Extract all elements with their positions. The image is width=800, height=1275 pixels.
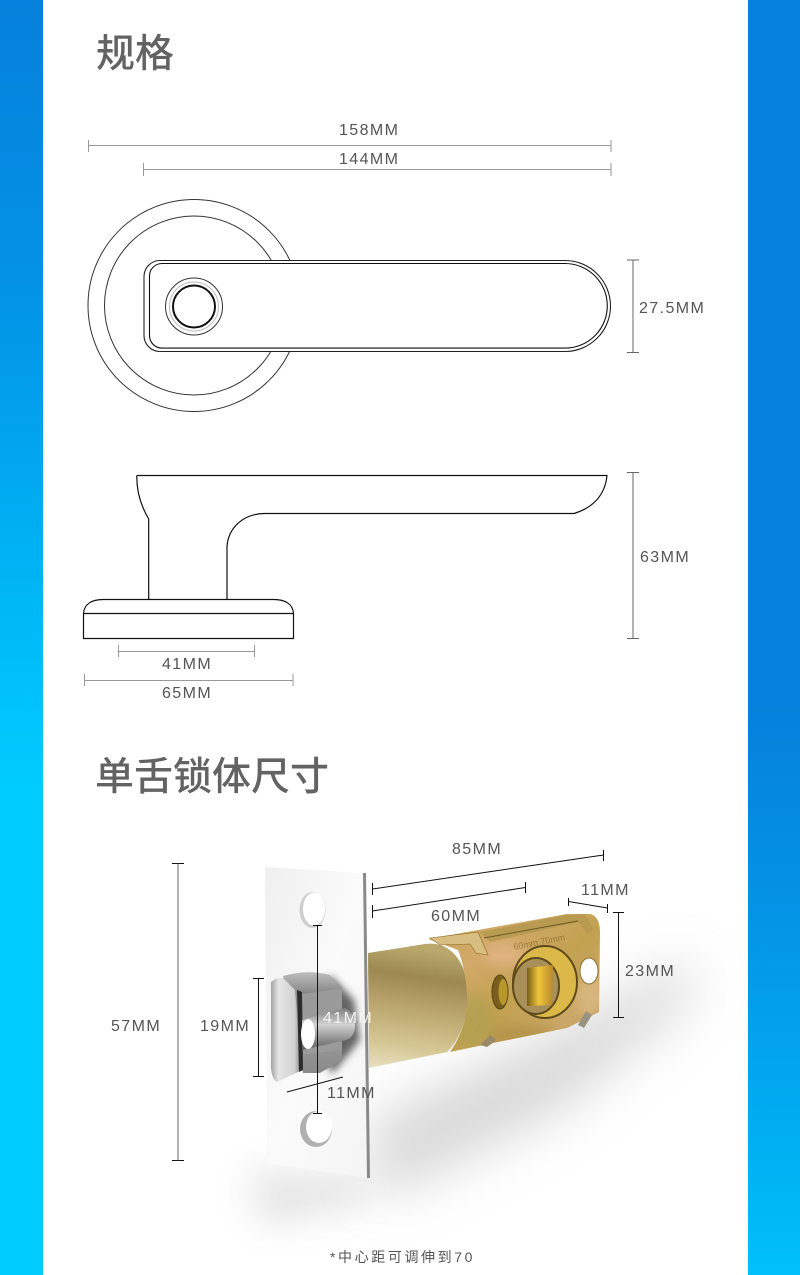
dimension: 158MM overall length [88,122,611,152]
square spindle hole [527,965,553,1006]
latch bolt [271,972,355,1082]
dimension: 144MM lever length: 144MM [339,151,399,168]
heading: latch body dimensions: 单舌锁体尺寸 [95,746,329,802]
oval slot [492,975,508,1009]
dimension: 23MM [613,912,675,1018]
dimension: 19MM [200,978,264,1076]
lower tabs [480,1035,497,1047]
dimension: 63MM height: 63MM [640,549,690,566]
faceplate [265,867,367,1178]
mottled plating [448,943,604,1046]
lock shadow [250,960,690,1225]
mounting hole [580,958,598,984]
photo: latch mechanism [265,867,604,1178]
rosette base [84,600,294,638]
spindle opening [513,946,577,1018]
dimension: 57MM [111,864,184,1160]
faceplate edge [363,873,370,1178]
dimension: 60MM: 60MM [431,908,481,925]
lever outline [144,260,610,352]
rosette circles [88,200,300,412]
dimension: 19MM: 19MM [200,1018,250,1035]
dimension: 27.5MM lever width: 27.5MM [639,300,705,317]
dimension: 11MM bracket: 11MM [581,882,630,899]
dimension: 63MM height [627,472,690,638]
top screw hole [300,892,326,928]
brass cylinder [368,944,468,1068]
dimension: 11MM bolt [287,1077,376,1102]
diagram: handle front view [88,200,610,412]
brass end bracket [428,914,604,1052]
dimension: 65MM: 65MM [162,685,212,702]
dimension: 144MM lever length [144,151,611,176]
dimension: 85MM [372,841,604,895]
dimension: 41MM: 41MM [162,656,212,673]
bottom screw hole [300,1111,332,1147]
dimension: 158MM overall length: 158MM [339,122,399,139]
right blue side bar [748,0,800,1275]
diagram: handle side view [84,476,607,638]
dimension: 57MM: 57MM [111,1018,161,1035]
left blue side bar [0,0,43,1275]
footnote: *中心距可调伸到70 [330,1249,475,1265]
contact shadow on faceplate [310,975,360,1074]
stamped marking: 60mm 70mm [512,932,566,952]
dimension: 11MM bracket [568,882,630,913]
dimension: 41MM [118,645,254,673]
dimension: 85MM: 85MM [452,841,502,858]
heading: specifications: 规格 [96,23,174,79]
dimension: 41MM hole spacing [313,926,373,1114]
dimension: 11MM bolt: 11MM [327,1085,376,1102]
dimension: 27.5MM lever width [627,260,705,352]
dimension: 60MM [372,882,526,925]
dimension: 65MM [84,674,293,702]
dimension: 41MM hole spacing: 41MM [323,1010,373,1027]
icon: fingerprint sensor [166,278,222,335]
dimension: 23MM: 23MM [625,963,675,980]
